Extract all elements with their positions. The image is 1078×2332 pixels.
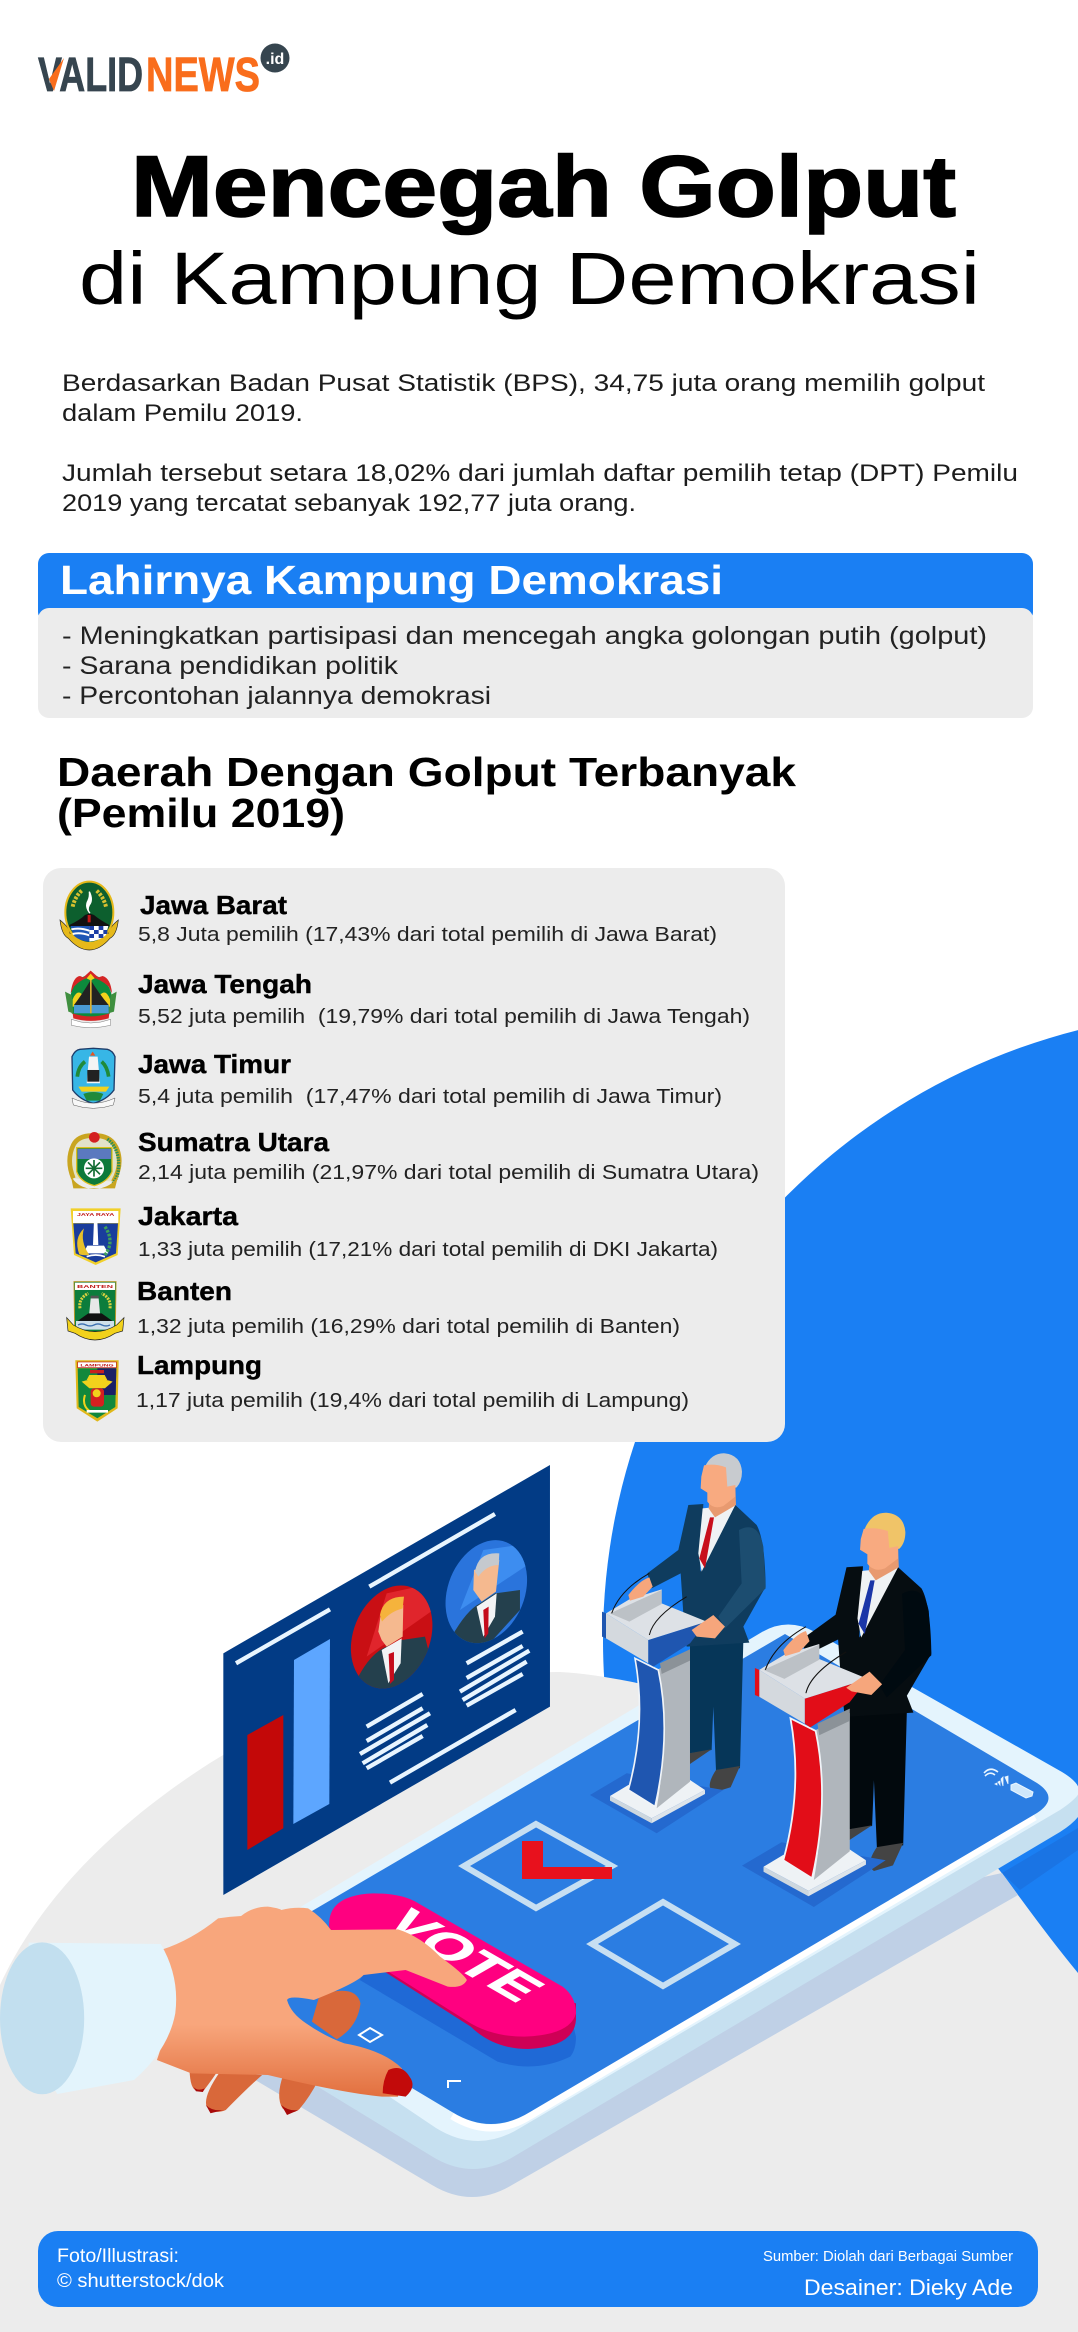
heading: daerah dengan golput terbanyak: Daerah Dengan Golput Terbanyak (57, 749, 796, 795)
row: Jawa Timur (138, 1049, 722, 1108)
left man hair and face (705, 1453, 742, 1489)
bullet list (62, 622, 987, 710)
phone cast shadow on blue (1002, 1828, 1078, 1890)
icon: emblem Jakarta: JAYA RAYA (77, 1212, 115, 1218)
illustration: candidate left (grey hair, blue podium) (590, 1453, 766, 1833)
illustration: display board (223, 1465, 550, 1895)
photo credit: Foto/Illustrasi: (57, 2246, 179, 2267)
row: Sumatra Utara (138, 1127, 759, 1184)
source and designer (763, 2248, 1013, 2300)
bullet list: - Sarana pendidikan politik (62, 652, 399, 680)
row: Banten (137, 1276, 680, 1338)
button label: VOTE (372, 1902, 556, 2009)
icon: emblem Lampung (75, 1360, 119, 1422)
row: Jawa Barat (138, 890, 717, 946)
thumb nail (383, 2068, 413, 2097)
left man shoes (689, 1749, 740, 1793)
icon: emblem Banten: BANTEN (77, 1284, 114, 1289)
illustration: hand pressing vote (0, 1907, 467, 2115)
logo (38, 44, 290, 102)
icon: emblem Sumatra Utara (70, 1132, 119, 1189)
illustration: candidate right (blond hair, red podium) (742, 1513, 931, 1907)
row: Lampung: 1,17 juta pemilih (19,4% dari total pemilih di Lampung) (136, 1390, 689, 1412)
row: Lampung (136, 1350, 689, 1412)
logo: VALID (38, 49, 143, 102)
row: Sumatra Utara: 2,14 juta pemilih (21,97% dari total pemilih di Sumatra Utara) (138, 1162, 759, 1184)
status icons (984, 1769, 1033, 1798)
left man suit (647, 1504, 766, 1647)
board lines (236, 1514, 529, 1783)
phone body (225, 1640, 1078, 2169)
cuff opening (0, 1942, 84, 2094)
portrait: candidate red (350, 1586, 432, 1688)
icon: emblem Jawa Barat (60, 882, 118, 950)
row: Lampung: Lampung (137, 1350, 262, 1380)
bullet list: - Percontohan jalannya demokrasi (62, 682, 491, 710)
row: Sumatra Utara: Sumatra Utara (138, 1127, 330, 1157)
icon: emblem Jawa Tengah (65, 971, 117, 1028)
icon: emblem Banten (67, 1282, 124, 1340)
section header bar (38, 553, 1033, 623)
right man body (802, 1513, 931, 1871)
small home icons (359, 2028, 461, 2088)
checkbox: empty (592, 1902, 735, 1986)
intro text: Jumlah tersebut setara 18,02% dari jumlah daftar pemilih tetap (DPT) Pemilu (62, 460, 1018, 487)
background: grey hill (0, 1672, 1078, 2332)
icon: emblem Lampung: LAMPUNG (80, 1362, 114, 1367)
vote button (329, 1893, 576, 2066)
phone inner white line (452, 1817, 1035, 2128)
background: blue circle (603, 1011, 1078, 2269)
bar chart (247, 1639, 330, 1850)
row: Jakarta: Jakarta (138, 1201, 239, 1231)
back fingers (189, 1991, 361, 2115)
title: di Kampung Demokrasi (79, 237, 980, 320)
row: Jawa Barat: Jawa Barat (140, 890, 287, 920)
row: Jawa Timur: 5,4 juta pemilih (17,47% dari total pemilih di Jawa Timur) (138, 1086, 722, 1108)
row: Jakarta (138, 1201, 718, 1261)
icon: emblem Jakarta (71, 1208, 121, 1265)
phone shadow (235, 1873, 1018, 2197)
portrait: candidate blue (446, 1540, 528, 1644)
left man hands (628, 1577, 725, 1638)
photo credit (57, 2246, 225, 2292)
source and designer: Sumber: Diolah dari Berbagai Sumber (763, 2248, 1013, 2265)
footer bar (38, 2231, 1038, 2307)
shirt cuff (28, 1943, 176, 2094)
row: Jawa Timur: Jawa Timur (138, 1049, 291, 1079)
phone screen (213, 1634, 1048, 2124)
row: Jawa Tengah: Jawa Tengah (138, 969, 312, 999)
checkbox: checked (464, 1824, 612, 1908)
source and designer: Desainer: Dieky Ade (804, 2275, 1013, 2300)
intro text (62, 370, 1018, 517)
photo credit: © shutterstock/dok (57, 2271, 225, 2292)
icon: emblem Jawa Timur (72, 1048, 115, 1108)
row: Jawa Barat: 5,8 Juta pemilih (17,43% dari total pemilih di Jawa Barat) (138, 924, 717, 946)
bullet list: - Meningkatkan partisipasi dan mencegah angka golongan putih (golput) (62, 622, 987, 650)
heading: daerah dengan golput terbanyak (57, 749, 796, 836)
hand palm and thumb (157, 1907, 467, 2097)
intro text: dalam Pemilu 2019. (62, 400, 303, 427)
row: Jakarta: 1,33 juta pemilih (17,21% dari total pemilih di DKI Jakarta) (138, 1239, 718, 1261)
intro text: Berdasarkan Badan Pusat Statistik (BPS), 34,75 juta orang memilih golput (62, 370, 985, 397)
illustration: smartphone (198, 1624, 1078, 2197)
intro text: 2019 yang tercatat sebanyak 192,77 juta orang. (62, 490, 636, 517)
blue podium (590, 1573, 723, 1833)
panel: daftar daerah (43, 868, 785, 1442)
logo: .id (266, 51, 284, 68)
row: Jawa Tengah: 5,52 juta pemilih (19,79% dari total pemilih di Jawa Tengah) (138, 1006, 750, 1028)
row: Banten: Banten (137, 1276, 232, 1306)
heading: daerah dengan golput terbanyak: (Pemilu 2019) (57, 790, 345, 836)
red podium (742, 1627, 886, 1907)
row: Banten: 1,32 juta pemilih (16,29% dari total pemilih di Banten) (137, 1316, 680, 1338)
left man legs (690, 1642, 743, 1770)
title (79, 139, 980, 320)
title: Mencegah Golput (131, 139, 956, 235)
row: Jawa Tengah (138, 969, 750, 1028)
section heading: Lahirnya Kampung Demokrasi (60, 557, 723, 603)
section body card (38, 608, 1033, 718)
logo: NEWS (146, 49, 260, 102)
phone frame (198, 1624, 1078, 2141)
panel: lahirnya kampung demokrasi (38, 553, 1033, 718)
